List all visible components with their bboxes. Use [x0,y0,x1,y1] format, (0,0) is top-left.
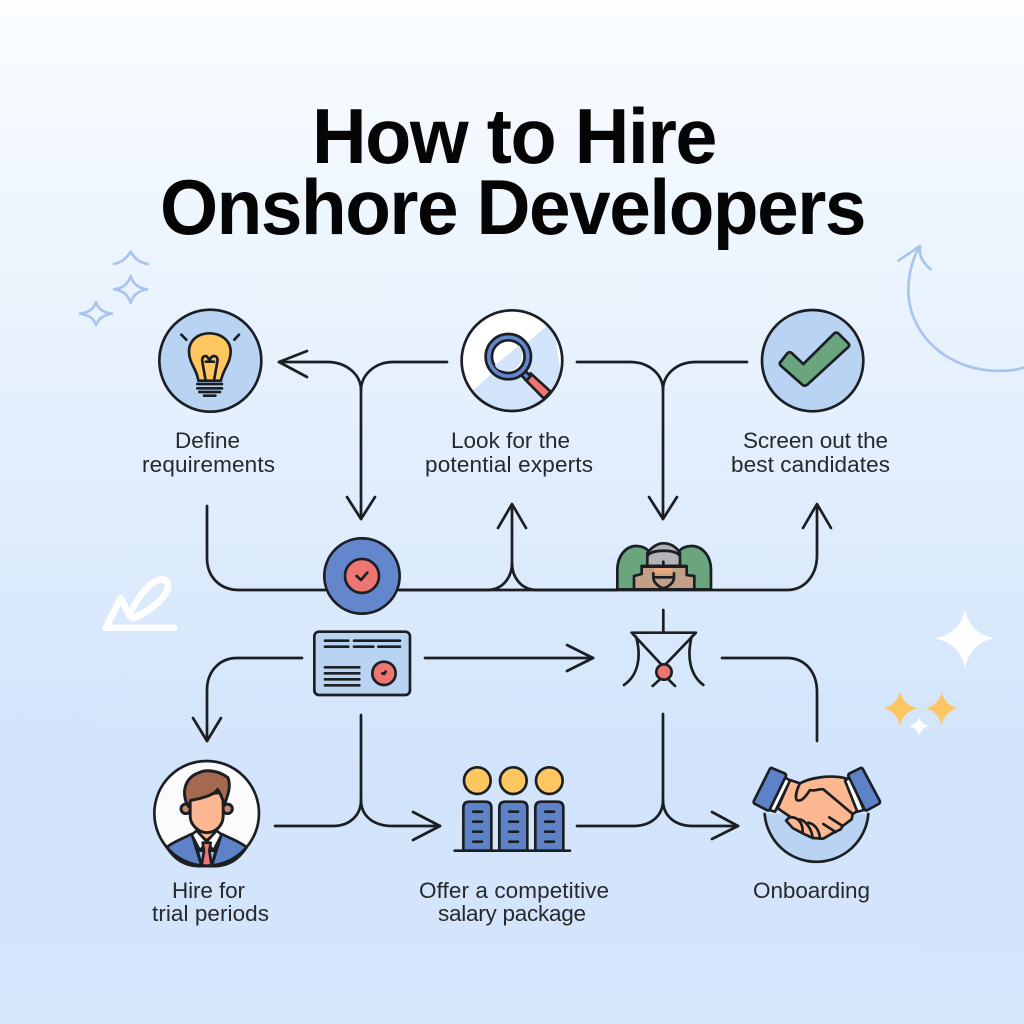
decorative blue sparkles [80,252,148,325]
label: define requirements [142,428,275,477]
label: offer a competitive salary package [419,878,609,926]
arrows: card to trial hire and to funnel [193,645,593,741]
icon: salary columns with coins [455,767,570,851]
label: hire for trial periods: Hire for [172,878,246,903]
title: Onshore Developers [160,163,865,251]
label: define requirements: requirements [142,452,275,477]
label: look for the potential experts: potential experts [425,452,593,477]
arrows: trial hire and card to salary [275,715,440,840]
decorative white pen mark [106,579,174,628]
decorative sparkles: white and yellow [884,610,993,737]
icon: person portrait [154,761,259,866]
title [160,92,865,251]
label: offer a competitive salary package: salary package [438,901,586,926]
icon: review badge [324,538,400,614]
arrow: requirements through badge to search and screening [207,504,831,590]
icon: light bulb [159,310,261,412]
label: define requirements: Define [175,428,240,453]
icon: interview figure [617,543,711,589]
label: look for the potential experts [425,428,593,477]
icon: credential card [314,632,410,695]
label: screen out the best candidates: Screen out the [743,428,888,453]
label: screen out the best candidates [731,428,890,477]
icon: magnifying glass [462,310,567,417]
arrows: salary and funnel to onboarding, onboarding to funnel [577,658,817,839]
label: screen out the best candidates: best candidates [731,452,890,477]
icon: check mark [762,310,863,411]
decorative curved arrow [898,246,1024,371]
arrow: search and screening join to interview figure [577,362,747,519]
label: onboarding: Onboarding [753,878,870,903]
icon: handshake [754,768,880,862]
title: How to Hire [312,92,716,180]
label: offer a competitive salary package: Offer a competitive [419,878,609,903]
arrow: search splits to requirements and review badge [279,351,447,519]
label: look for the potential experts: Look for the [451,428,570,453]
icon: funnel [624,610,703,686]
label: hire for trial periods: trial periods [152,901,269,926]
label: hire for trial periods [152,878,269,926]
